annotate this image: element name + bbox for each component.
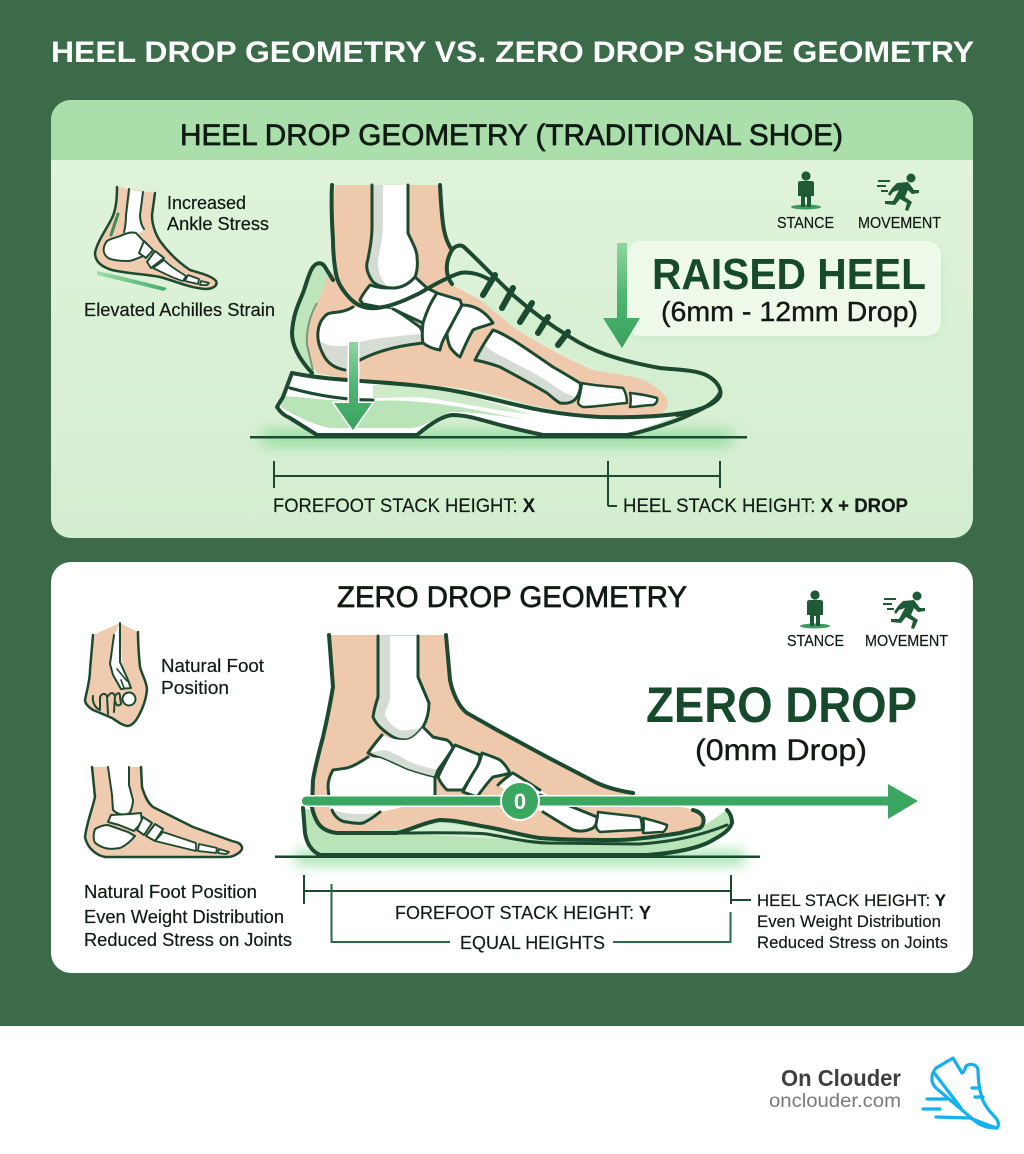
- ground glow: [295, 851, 745, 865]
- footer brand text: On Clouder: [781, 1065, 901, 1091]
- arrow: zero drop level line: [302, 782, 918, 820]
- foot skin: [307, 185, 668, 417]
- label: equal heights: EQUAL HEIGHTS: [460, 932, 605, 953]
- main title: HEEL DROP GEOMETRY VS. ZERO DROP SHOE GEOMETRY: [51, 36, 974, 69]
- sole lines: [292, 373, 693, 417]
- calcaneus: [318, 307, 423, 370]
- panel background: [51, 100, 973, 538]
- label: increased ankle stress: Ankle Stress: [167, 214, 269, 234]
- tibia bone: [373, 636, 429, 740]
- big label: raised heel: RAISED HEEL: [652, 250, 926, 299]
- icon: movement: [877, 174, 919, 211]
- metatarsal: [498, 773, 597, 831]
- panel: heel drop geometry: [51, 100, 973, 538]
- label: stance: STANCE: [787, 633, 844, 650]
- drop range: (6mm - 12mm Drop): [661, 296, 918, 327]
- midfoot bones: [438, 745, 480, 790]
- calcaneus: [328, 757, 435, 823]
- laces: [483, 275, 568, 345]
- left benefits list: Reduced Stress on Joints: [84, 930, 292, 950]
- ground line: [250, 436, 747, 438]
- sole fill: [303, 808, 732, 855]
- right benefits list: Reduced Stress on Joints: [757, 934, 948, 952]
- metatarsal: [475, 330, 580, 403]
- callout: raised heel: [627, 241, 941, 338]
- arrow: raised heel down: [603, 243, 640, 348]
- left benefits list: Even Weight Distribution: [84, 907, 284, 927]
- right benefits list: HEEL STACK HEIGHT: Y: [757, 892, 946, 910]
- icon: running shoe logo: [923, 1058, 998, 1128]
- midfoot bones: [422, 293, 462, 350]
- small foot icon: ankle stress: [95, 187, 217, 291]
- tongue and lace line: [447, 246, 720, 415]
- label: natural foot position: [161, 656, 264, 698]
- label: stance: STANCE: [777, 215, 834, 232]
- heading: heel drop geometry: HEEL DROP GEOMETRY (TRADITIONAL SHOE): [180, 119, 843, 152]
- ground glow: [262, 431, 732, 445]
- label: natural foot position: Natural Foot: [161, 656, 264, 676]
- label: movement: MOVEMENT: [865, 633, 948, 650]
- label: forefoot stack height: FOREFOOT STACK HEIGHT: X: [273, 496, 535, 517]
- icon: movement: [883, 592, 925, 629]
- panel background: [51, 562, 973, 973]
- zero badge: 0: [514, 789, 526, 814]
- right benefits list: Even Weight Distribution: [757, 913, 941, 931]
- right benefits list: [757, 892, 948, 952]
- strain line: [97, 271, 167, 291]
- talus: [360, 277, 437, 323]
- heel arrow: [334, 342, 372, 430]
- label: increased ankle stress: [167, 193, 269, 234]
- phalanges: [596, 812, 642, 832]
- label: increased ankle stress: Increased: [167, 193, 246, 213]
- panel: zero drop geometry: [51, 562, 973, 973]
- label: movement: MOVEMENT: [858, 215, 941, 232]
- heel counter: [292, 263, 333, 373]
- talus: [368, 727, 453, 778]
- footer background: [0, 1026, 1024, 1154]
- ground line: [275, 856, 760, 858]
- leg and shoe outlines: [332, 185, 490, 308]
- heading: zero drop geometry: ZERO DROP GEOMETRY: [337, 581, 687, 614]
- footer brand text: [769, 1065, 901, 1112]
- label: elevated achilles strain: Elevated Achilles Strain: [84, 300, 275, 320]
- icon: top view foot: [85, 623, 147, 726]
- tibia bone: [367, 185, 417, 288]
- foot skin: [312, 635, 703, 840]
- icon: stance: [800, 590, 830, 628]
- sub label: 0mm drop: (0mm Drop): [695, 734, 867, 767]
- illustration: traditional shoe with foot skeleton: [277, 185, 720, 435]
- left benefits list: [84, 882, 292, 950]
- footer brand text: onclouder.com: [769, 1091, 901, 1112]
- label: heel stack height: HEEL STACK HEIGHT: X + DROP: [623, 496, 908, 517]
- dimension brackets: [304, 875, 751, 904]
- heel counter fill: [292, 263, 335, 373]
- sole outlines: [303, 808, 732, 855]
- upper green toe: [480, 285, 719, 414]
- panel header band: [51, 100, 973, 160]
- icon: side view foot: [85, 767, 242, 857]
- icon: stance: [791, 171, 821, 210]
- left benefits list: Natural Foot Position: [84, 882, 257, 902]
- sole silhouette: [277, 373, 720, 435]
- dimension brackets: [274, 461, 720, 506]
- midsole green fill: [281, 396, 530, 428]
- phalanges: [578, 383, 627, 407]
- big label: zero drop: ZERO DROP: [646, 677, 917, 733]
- foot outlines: [312, 635, 704, 840]
- zero badge: [501, 782, 539, 820]
- label: forefoot stack height: FOREFOOT STACK HEIGHT: Y: [395, 902, 652, 923]
- label: natural foot position: Position: [161, 678, 229, 698]
- illustration: zero drop shoe with foot skeleton: [302, 635, 918, 855]
